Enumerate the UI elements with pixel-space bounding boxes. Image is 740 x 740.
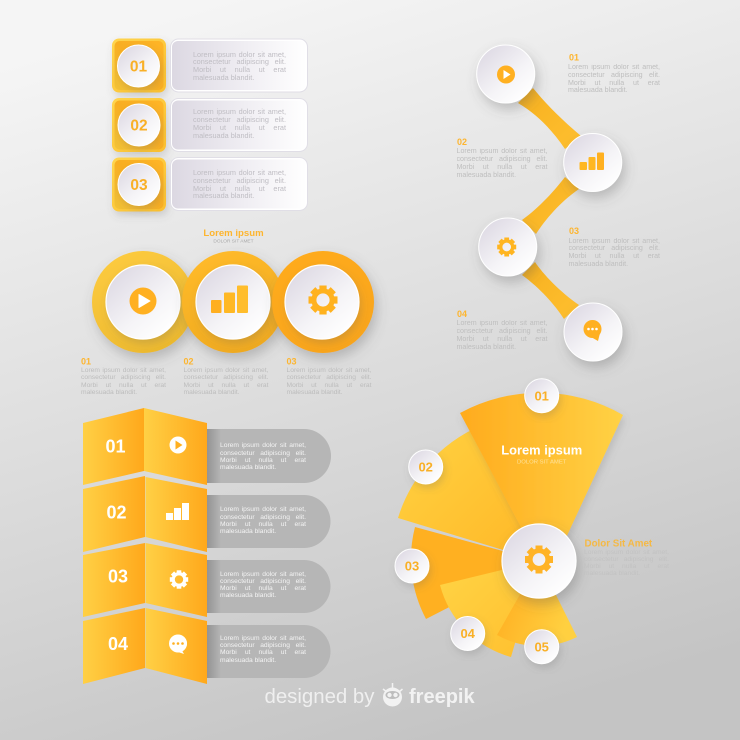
row 02: Morbi ut nulla ut erat: [220, 521, 306, 528]
row 03: Morbi ut nulla ut erat: [193, 184, 286, 193]
row 04: consectetur adipiscing elit.: [220, 642, 306, 649]
caption 03: malesuada blandit.: [286, 389, 343, 396]
fan caption: Morbi ut nulla ut erat: [584, 563, 669, 570]
caption 02: 02: [184, 356, 194, 366]
row 02: [83, 476, 331, 552]
row 01: Lorem ipsum dolor sit amet,: [220, 442, 306, 449]
circle 03 with gear icon: [272, 251, 374, 353]
fan sector 02: [398, 422, 539, 561]
row 01: 01: [130, 58, 147, 76]
row 03: Morbi ut nulla ut erat: [220, 585, 306, 592]
caption 01: malesuada blandit.: [81, 389, 137, 396]
caption 02: Morbi ut nulla ut erat: [184, 382, 268, 389]
caption 03: Morbi ut nulla ut erat: [286, 382, 372, 389]
fan heading: [501, 442, 582, 466]
caption 03: Morbi ut nulla ut erat: [568, 252, 660, 260]
caption 02: [456, 137, 548, 180]
caption 02: [184, 356, 268, 398]
row 03: consectetur adipiscing elit.: [193, 176, 286, 185]
row 03: malesuada blandit.: [220, 592, 276, 599]
row 03: 03: [130, 177, 148, 194]
caption 01: malesuada blandit.: [568, 86, 628, 94]
caption 03: 03: [569, 226, 579, 236]
row 03: [83, 543, 331, 617]
heading: Lorem ipsum: [203, 228, 264, 239]
caption 01: consectetur adipiscing elit.: [568, 71, 660, 79]
circle 01 with play icon: [92, 251, 194, 353]
row 02: malesuada blandit.: [193, 131, 254, 140]
footer credit: [264, 683, 475, 708]
caption 01: 01: [569, 52, 579, 62]
caption 01: Morbi ut nulla ut erat: [81, 382, 166, 389]
row 02: 02: [130, 118, 148, 134]
panel: three linked circles: [81, 228, 374, 398]
row 01: 01: [105, 436, 126, 456]
fan caption: consectetur adipiscing elit.: [584, 556, 669, 563]
badge 03: 03: [405, 559, 419, 574]
row 02: Lorem ipsum dolor sit amet,: [220, 506, 306, 513]
row 03: Lorem ipsum dolor sit amet,: [220, 570, 306, 578]
heading: DOLOR SIT AMET: [213, 238, 254, 244]
caption 04: consectetur adipiscing elit.: [456, 327, 548, 335]
badge 04: [451, 616, 485, 650]
caption 02: consectetur adipiscing elit.: [184, 374, 268, 381]
panel: zig-zag timeline: [456, 45, 660, 361]
row 02: consectetur adipiscing elit.: [220, 514, 306, 520]
caption 02: consectetur adipiscing elit.: [456, 155, 548, 163]
icon: freepik mascot: [383, 683, 402, 706]
row 01: consectetur adipiscing elit.: [220, 450, 306, 456]
caption 02: 02: [457, 137, 467, 147]
caption 01: Lorem ipsum dolor sit amet,: [81, 367, 166, 374]
badge 01: [525, 379, 559, 413]
badge 02: 02: [418, 460, 433, 475]
row 03: malesuada blandit.: [193, 191, 254, 200]
row 04: 04: [108, 634, 128, 654]
caption 04: Morbi ut nulla ut erat: [456, 335, 548, 343]
node 01 with play icon: [477, 45, 535, 103]
fan sector 05: [497, 561, 577, 646]
fan sector 03: [411, 527, 539, 619]
hub with gear icon: [502, 524, 576, 598]
caption 02: Morbi ut nulla ut erat: [456, 163, 548, 171]
caption 01: Morbi ut nulla ut erat: [568, 79, 660, 87]
row 04: malesuada blandit.: [220, 657, 276, 664]
row 03: [112, 158, 308, 212]
row 03: consectetur adipiscing elit.: [220, 578, 306, 585]
panel: fan chart: [395, 379, 669, 664]
row 04: Morbi ut nulla ut erat: [220, 649, 306, 656]
caption 01: [568, 52, 660, 96]
fan heading: DOLOR SIT AMET: [517, 460, 567, 466]
caption 02: malesuada blandit.: [456, 171, 516, 179]
panel: folded ribbon list: [83, 408, 331, 684]
fan caption: malesuada blandit.: [584, 570, 640, 577]
row 04: [83, 608, 331, 684]
row 01: [112, 38, 308, 92]
row 02: 02: [106, 502, 127, 522]
row 01: Morbi ut nulla ut erat: [193, 65, 286, 74]
caption 04: 04: [457, 309, 467, 319]
row 02: [112, 98, 308, 152]
heading: [203, 228, 264, 244]
badge 02: [409, 450, 443, 484]
row 01: malesuada blandit.: [220, 464, 276, 471]
caption 03: [568, 226, 660, 270]
caption 03: Lorem ipsum dolor sit amet,: [286, 367, 372, 374]
footer credit: freepik: [409, 686, 475, 708]
caption 04: malesuada blandit.: [456, 343, 516, 351]
caption 04: [456, 309, 548, 352]
row 01: Morbi ut nulla ut erat: [220, 457, 306, 464]
row 02: malesuada blandit.: [220, 528, 276, 535]
panel: numbered list top left: [112, 38, 308, 212]
row 03: 03: [108, 566, 128, 586]
row 04: Lorem ipsum dolor sit amet,: [220, 635, 306, 642]
connecting ribbons: [518, 88, 581, 319]
circle 02 with bars icon: [182, 251, 284, 353]
caption 03: [286, 356, 372, 398]
fan heading: Lorem ipsum: [501, 442, 582, 458]
fan sector 01: [460, 393, 623, 561]
row 01: [83, 408, 331, 485]
row 01: consectetur adipiscing elit.: [193, 57, 286, 66]
caption 01: 01: [81, 356, 91, 366]
badge 01: 01: [534, 388, 549, 404]
fan caption: [584, 538, 669, 580]
footer credit: designed by: [264, 686, 375, 708]
fan caption: Lorem ipsum dolor sit amet,: [584, 549, 669, 556]
badge 04: 04: [460, 626, 476, 641]
badge 05: 05: [534, 639, 549, 654]
caption 03: 03: [286, 356, 297, 366]
caption 02: malesuada blandit.: [184, 389, 240, 396]
node 03 with gear icon: [479, 218, 537, 276]
caption 03: malesuada blandit.: [568, 260, 628, 268]
badge 05: [525, 630, 559, 664]
row 02: consectetur adipiscing elit.: [193, 115, 286, 124]
badge 03: [395, 549, 429, 583]
caption 03: consectetur adipiscing elit.: [568, 244, 660, 252]
row 02: Morbi ut nulla ut erat: [193, 123, 286, 132]
caption 02: Lorem ipsum dolor sit amet,: [184, 367, 268, 374]
row 01: malesuada blandit.: [193, 73, 254, 82]
caption 01: consectetur adipiscing elit.: [81, 374, 166, 381]
fan caption: Dolor Sit Amet: [584, 538, 653, 550]
node 04 with chat icon: [564, 303, 622, 361]
caption 03: consectetur adipiscing elit.: [286, 374, 372, 381]
caption 01: [81, 356, 166, 398]
fan sector 04: [440, 561, 539, 657]
node 02 with bars icon: [564, 134, 622, 192]
